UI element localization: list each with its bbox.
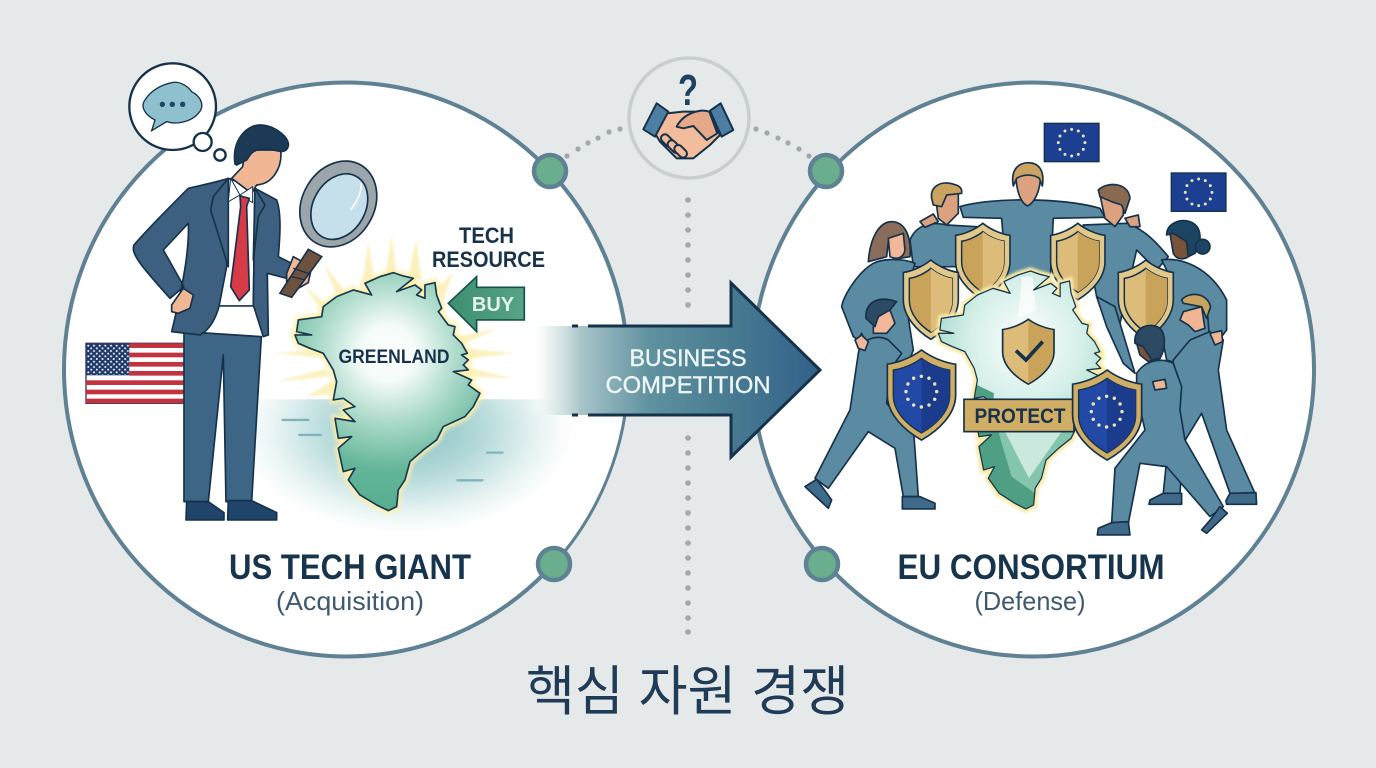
EU shield right bbox=[1073, 370, 1142, 460]
sea ripples bbox=[282, 420, 503, 480]
circle: EU panel bbox=[752, 82, 1314, 656]
island terrain layers bbox=[963, 277, 1103, 517]
person: woman left bbox=[842, 260, 915, 377]
island: Greenland bbox=[295, 273, 480, 511]
subheading: defense: (Defense) bbox=[974, 586, 1086, 616]
label: greenland: GREENLAND bbox=[338, 347, 450, 368]
shirt bbox=[218, 178, 255, 306]
label: tech resource: RESOURCE bbox=[432, 247, 545, 272]
person: lower left bbox=[805, 299, 935, 509]
US flag bbox=[86, 343, 186, 403]
island outline bbox=[938, 271, 1112, 509]
buy arrow bbox=[448, 277, 524, 332]
sea bbox=[256, 399, 624, 549]
shoes bbox=[186, 502, 224, 520]
collar bbox=[228, 178, 253, 203]
label: protect: PROTECT bbox=[974, 405, 1066, 428]
panel: US tech giant bbox=[64, 63, 640, 656]
light rays bbox=[275, 235, 513, 397]
connector node bottom left bbox=[538, 548, 570, 580]
label: tech resource: TECH bbox=[459, 223, 514, 248]
tie bbox=[231, 196, 249, 301]
connector node top left bbox=[534, 155, 566, 187]
circle: US panel bbox=[64, 82, 628, 656]
island: Greenland protected bbox=[938, 271, 1112, 509]
infographic canvas bbox=[62, 56, 1316, 714]
connector node top right bbox=[810, 155, 842, 187]
arrow label: BUSINESS bbox=[630, 345, 746, 372]
label: buy: BUY bbox=[472, 294, 515, 316]
hair bbox=[235, 125, 288, 165]
neck and face bbox=[232, 150, 281, 193]
heading: EU consortium: EU CONSORTIUM bbox=[898, 548, 1164, 587]
EU shield left bbox=[887, 350, 956, 440]
people: back row bbox=[842, 163, 1227, 377]
connector node bottom right bbox=[806, 548, 838, 580]
icon: handshake with question mark: ? bbox=[678, 66, 698, 115]
left hand bbox=[172, 288, 193, 313]
big arrow: business competition bbox=[530, 283, 820, 457]
central shield with check bbox=[1003, 319, 1054, 384]
thought bubble bbox=[129, 63, 226, 161]
island glow bbox=[938, 271, 1112, 509]
protect banner bbox=[964, 399, 1074, 432]
magnifying glass bbox=[280, 147, 392, 297]
dotted connectors bbox=[564, 126, 812, 635]
icon: handshake with question mark bbox=[629, 58, 749, 178]
jacket bbox=[133, 178, 228, 335]
arrow label: COMPETITION bbox=[606, 372, 770, 399]
trousers bbox=[184, 332, 261, 502]
EU flags bbox=[1044, 123, 1226, 211]
businessman bbox=[133, 125, 292, 520]
panel: EU consortium bbox=[752, 82, 1314, 656]
gold shields bbox=[903, 223, 1173, 339]
subheading: acquisition: (Acquisition) bbox=[276, 586, 424, 616]
people: right front bbox=[1097, 294, 1257, 535]
person: woman right bbox=[1160, 259, 1227, 367]
island glow bbox=[295, 273, 480, 511]
title: 핵심 자원 경쟁 bbox=[526, 662, 849, 722]
heading: US tech giant: US TECH GIANT bbox=[229, 548, 471, 587]
